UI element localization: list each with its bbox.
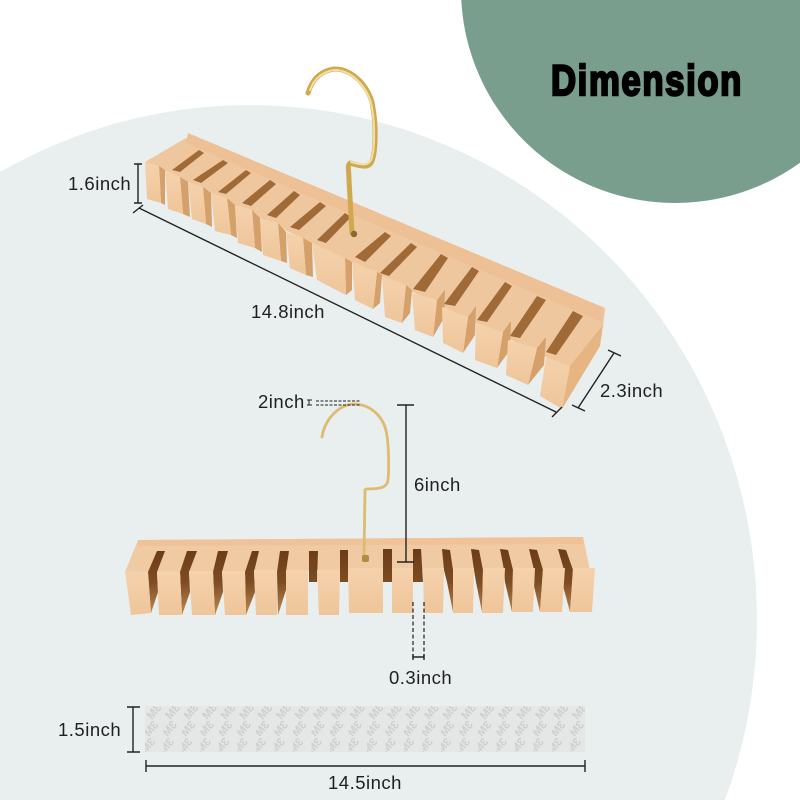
front view wooden tie rack — [125, 404, 595, 615]
back rail — [138, 537, 584, 546]
dimension: 14.8 inch — [133, 205, 562, 417]
adhesive tape strip — [145, 706, 585, 752]
angled wooden tie rack — [145, 69, 605, 409]
dimension: 14.5 inch: 14.5inch — [328, 772, 402, 793]
dimension: 6 inch — [397, 405, 461, 562]
tooth side faces — [159, 166, 546, 385]
dimension: 1.5 inch — [58, 707, 140, 752]
dimension: 2.3 inch — [572, 350, 663, 411]
hook — [308, 69, 375, 237]
back rail — [186, 133, 605, 322]
dimension: 2.3 inch: 2.3inch — [600, 380, 663, 401]
slots — [172, 150, 583, 355]
dimension: 1.5 inch: 1.5inch — [58, 719, 121, 740]
dimension: 2 inch: 2inch — [258, 391, 305, 412]
title: Dimension — [551, 57, 743, 105]
hook — [322, 404, 389, 562]
dimension: 2 inch — [258, 391, 360, 412]
dimension: 1.6 inch — [68, 164, 142, 203]
tooth fronts — [125, 568, 595, 615]
dimension: 14.5 inch — [146, 760, 585, 793]
gaps between teeth — [148, 549, 573, 615]
green corner circle — [461, 0, 800, 203]
end side face — [562, 325, 603, 409]
dimension: 6 inch: 6inch — [414, 474, 461, 495]
dimension: 1.6 inch: 1.6inch — [68, 173, 131, 194]
dimension: 14.8 inch: 14.8inch — [251, 301, 325, 322]
rack top surface — [145, 138, 605, 368]
tooth fronts — [145, 162, 570, 409]
dimension: 0.3 inch: 0.3inch — [389, 667, 452, 688]
dimension: 0.3 inch — [389, 602, 452, 688]
rack top surface — [125, 537, 590, 572]
